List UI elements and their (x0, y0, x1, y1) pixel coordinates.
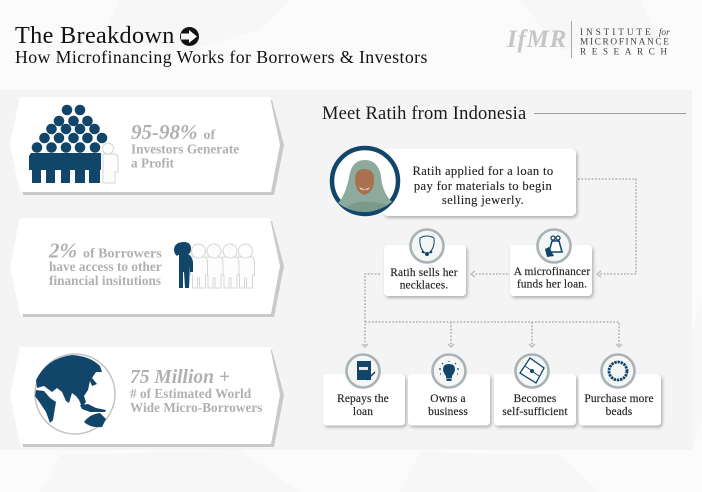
card: Repays the loan (323, 354, 405, 426)
card: Repays the loan: loan (353, 406, 373, 418)
card: Ratih sells her necklaces (384, 230, 466, 296)
panel: investors stat (10, 97, 284, 195)
stat text: 2% of Borrowers (48, 238, 162, 262)
logo: IfMR: RESEARCH (580, 48, 673, 58)
callout: Ratih applied: selling jewerly. (442, 193, 524, 207)
panel: borrowers stat (10, 218, 284, 317)
icon: banknotes (516, 354, 548, 388)
card: Purchase more beads (579, 354, 661, 426)
callout: Ratih applied: pay for materials to begin (414, 179, 552, 193)
card: A microfinancer funds her loan (510, 230, 592, 296)
card: Ratih sells her necklaces: necklaces. (400, 280, 448, 292)
icon: globe (35, 354, 115, 434)
card: A microfinancer funds her loan: A microfinancer (514, 266, 590, 278)
card: Purchase more beads: beads (606, 406, 633, 418)
card: Owns a business: Owns a (430, 393, 466, 405)
title: The Breakdown (15, 22, 175, 49)
logo: IfMR (506, 21, 673, 58)
stat text: Wide Micro-Borrowers (130, 400, 262, 415)
icon: document (346, 354, 380, 388)
stat text: Investors Generate (131, 142, 239, 156)
icon: five people, one highlighted (174, 242, 254, 288)
logo: IfMR: MICROFINANCE (580, 38, 671, 48)
stat text (131, 120, 239, 170)
card: Repays the loan: Repays the (337, 393, 389, 405)
stat text (130, 367, 262, 415)
callout: Ratih applied (383, 148, 576, 216)
logo: IfMR: INSTITUTE for (580, 27, 670, 38)
icon: money bag in hand (538, 230, 570, 262)
callout: Ratih applied: Ratih applied for a loan to (412, 164, 554, 178)
card: Owns a business: business (428, 406, 468, 418)
card: Becomes self-sufficient: self-sufficient (502, 406, 568, 418)
icon: light bulb (432, 354, 466, 388)
card: A microfinancer funds her loan: funds her loan. (517, 278, 587, 290)
arrows: flow connectors (362, 179, 636, 347)
icon: bead ring (602, 354, 634, 388)
portrait: Ratih (332, 148, 398, 214)
card: Becomes self-sufficient (494, 354, 576, 426)
icon: arrow in circle (180, 27, 199, 46)
panel: world borrowers stat (10, 347, 284, 447)
icon: crowd of investors (29, 105, 118, 183)
stat text: 75 Million + (130, 367, 230, 388)
icon: necklace (410, 230, 444, 262)
heading: Meet Ratih: Meet Ratih from Indonesia (322, 104, 526, 124)
stat text: 95-98% of (131, 120, 216, 144)
stat text: financial insitutions (49, 273, 161, 288)
card: Becomes self-sufficient: Becomes (514, 393, 557, 405)
stat text (48, 238, 162, 288)
subtitle: How Microfinancing Works for Borrowers & Investors (15, 47, 428, 67)
stat text: # of Estimated World (130, 386, 252, 401)
stat text: a Profit (131, 156, 175, 170)
stat text: have access to other (49, 259, 162, 274)
card: Ratih sells her necklaces: Ratih sells her (390, 267, 458, 279)
card: Purchase more beads: Purchase more (584, 393, 654, 405)
logo: IfMR: IfMR (506, 26, 567, 53)
background panel (0, 90, 692, 450)
card: Owns a business (408, 354, 490, 426)
